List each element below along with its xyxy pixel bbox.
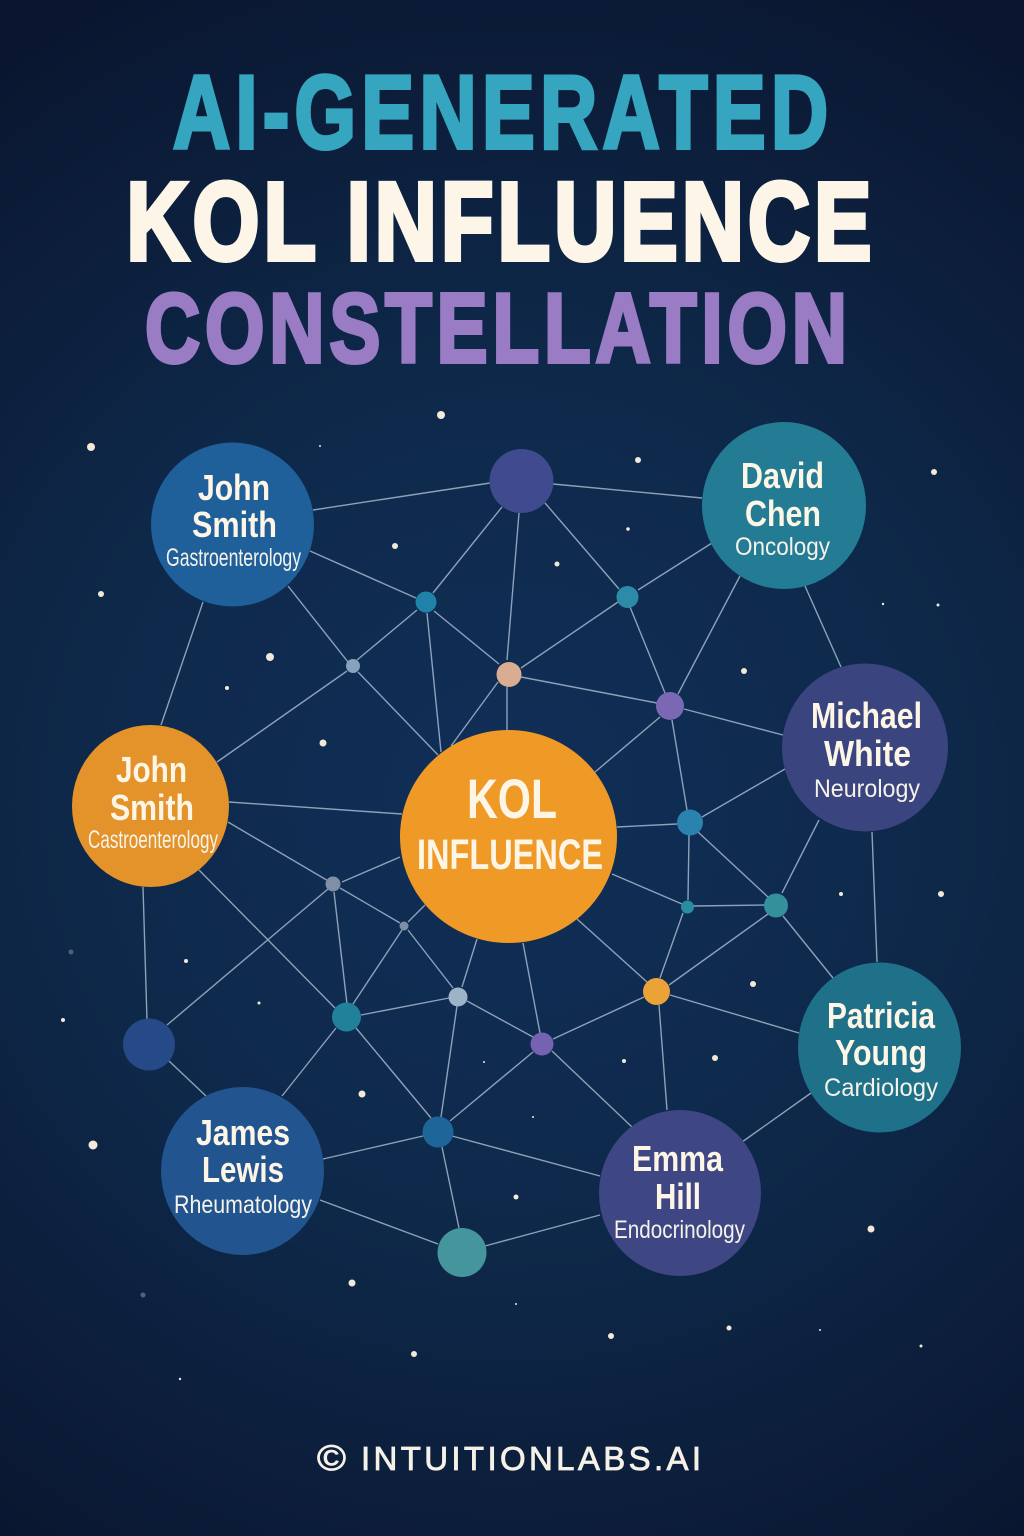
- central node: KOL Influence: [400, 730, 617, 943]
- node: James Lewis, Rheumatology: Rheumatology: [174, 1191, 312, 1219]
- node: Michael White, Neurology: Michael: [811, 695, 922, 736]
- footer credit: ©: [317, 1437, 346, 1478]
- node: John Smith, Gastroenterology: Smith: [192, 504, 277, 545]
- small network nodes: [123, 449, 788, 1277]
- node: James Lewis, Rheumatology: James: [196, 1112, 290, 1153]
- central node: KOL Influence: KOL: [467, 767, 557, 830]
- network links: [143, 483, 877, 1246]
- star field: [61, 411, 944, 1380]
- node: John Smith, Castroenterology (orange): John: [116, 749, 187, 790]
- node: Patricia Young, Cardiology: [798, 962, 961, 1132]
- node: James Lewis, Rheumatology: Lewis: [202, 1149, 284, 1190]
- node: Patricia Young, Cardiology: Cardiology: [824, 1074, 938, 1102]
- central node: KOL Influence: INFLUENCE: [417, 831, 603, 879]
- node: Michael White, Neurology: [782, 664, 948, 832]
- node: Michael White, Neurology: Neurology: [814, 775, 920, 803]
- footer credit: INTUITIONLABS.AI: [361, 1440, 701, 1477]
- node: John Smith, Gastroenterology: [151, 442, 314, 606]
- node: John Smith, Gastroenterology: John: [198, 467, 270, 508]
- node: Emma Hill, Endocrinology: Emma: [632, 1138, 724, 1179]
- node: John Smith, Castroenterology (orange): [72, 725, 229, 887]
- node: Patricia Young, Cardiology: Young: [835, 1032, 927, 1073]
- title line: KOL INFLUENCE: KOL INFLUENCE: [126, 160, 871, 283]
- node: James Lewis, Rheumatology: [161, 1087, 324, 1255]
- title line: CONSTELLATION: CONSTELLATION: [145, 273, 847, 383]
- title line: AI-GENERATED: AI-GENERATED: [173, 53, 828, 171]
- node: David Chen, Oncology: Oncology: [735, 533, 830, 561]
- node: John Smith, Castroenterology (orange): Castroenterology: [88, 826, 218, 854]
- node: Michael White, Neurology: White: [824, 733, 911, 774]
- node: Emma Hill, Endocrinology: Hill: [655, 1176, 701, 1217]
- node: David Chen, Oncology: David: [741, 455, 824, 496]
- node: John Smith, Gastroenterology: Gastroenterology: [166, 544, 301, 572]
- node: David Chen, Oncology: [702, 422, 866, 589]
- node: Patricia Young, Cardiology: Patricia: [827, 995, 936, 1036]
- node: Emma Hill, Endocrinology: [599, 1110, 761, 1276]
- node: David Chen, Oncology: Chen: [745, 493, 821, 534]
- title: [126, 53, 871, 383]
- node: Emma Hill, Endocrinology: Endocrinology: [614, 1216, 745, 1244]
- node: John Smith, Castroenterology (orange): Smith: [110, 787, 194, 828]
